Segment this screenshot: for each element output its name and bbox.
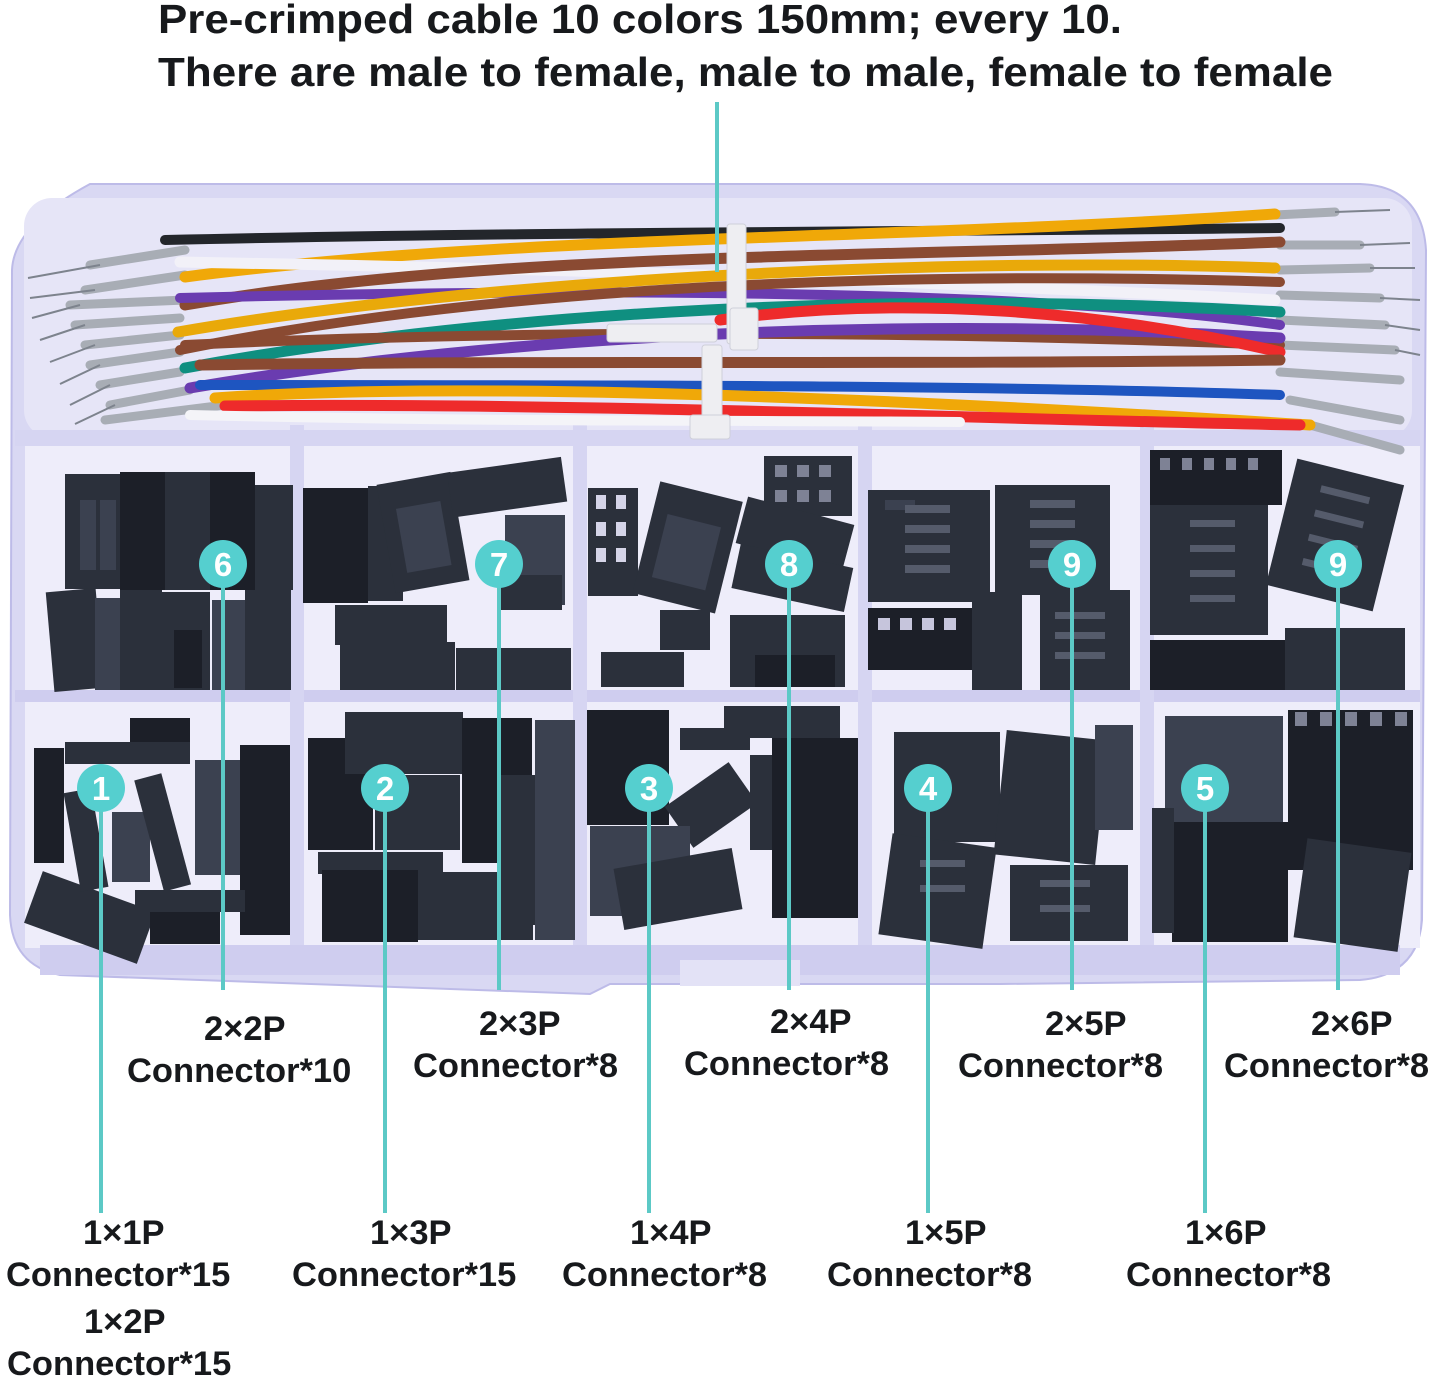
marker 1: 1 (92, 770, 110, 807)
label 1x1P and 1x2P: Connector*15 (6, 1256, 230, 1294)
cable terminals left (70, 250, 225, 420)
compartment: 1x4P connectors (587, 706, 858, 930)
label 2x6P: Connector*8 (1224, 1047, 1429, 1085)
label 1x4P: 1×4P (630, 1214, 712, 1252)
title: There are male to female, male to male, female to female (158, 49, 1333, 95)
wire bundle (28, 210, 1420, 450)
marker 2: 2 (376, 770, 394, 807)
label 1x1P and 1x2P: 1×1P (83, 1214, 165, 1252)
organizer box (10, 184, 1426, 994)
cable callout line (715, 102, 719, 272)
cable ties (607, 224, 758, 439)
label 1x5P: Connector*8 (827, 1256, 1032, 1294)
label 1x6P: 1×6P (1185, 1214, 1267, 1252)
marker 9 right: 9 (1329, 546, 1347, 583)
marker 4 (904, 764, 952, 1213)
marker 8: 8 (780, 546, 798, 583)
compartment: 1x6P connectors (1152, 710, 1413, 952)
label 2x2P: Connector*10 (127, 1052, 351, 1090)
label 1x6P: Connector*8 (1126, 1256, 1331, 1294)
compartment: 1x3P connectors (308, 712, 575, 942)
colored wires (165, 228, 1280, 240)
marker 9 left: 9 (1063, 546, 1081, 583)
label 2x4P: Connector*8 (684, 1045, 889, 1083)
label 2x4P: 2×4P (770, 1003, 852, 1041)
marker 6 (199, 540, 247, 990)
compartment: 2x5P connectors (868, 485, 1130, 690)
cable terminals right (1275, 212, 1400, 450)
marker 3: 3 (640, 770, 658, 807)
marker 4: 4 (919, 770, 938, 807)
label 1x3P: Connector*15 (292, 1256, 516, 1294)
label 2x6P: 2×6P (1311, 1005, 1393, 1043)
marker 5 (1181, 764, 1229, 1213)
compartment: 1x1P and 1x2P connectors (24, 718, 290, 964)
marker 9 right (1314, 540, 1362, 990)
marker 5: 5 (1196, 770, 1214, 807)
marker 2 (361, 764, 409, 1213)
label 2x2P: 2×2P (204, 1010, 286, 1048)
label 2x5P: Connector*8 (958, 1047, 1163, 1085)
label 2x3P: 2×3P (479, 1005, 561, 1043)
marker 7: 7 (490, 546, 508, 583)
label 2x5P: 2×5P (1045, 1005, 1127, 1043)
label 1x5P: 1×5P (905, 1214, 987, 1252)
title (158, 0, 1333, 95)
compartment: 2x2P connectors (46, 472, 293, 692)
marker 7 (475, 540, 523, 990)
marker 3 (625, 764, 673, 1213)
label 1x1P and 1x2P: 1×2P (84, 1303, 166, 1341)
marker 6: 6 (214, 546, 232, 583)
compartment: 2x4P connectors (588, 456, 854, 687)
marker 8 (765, 540, 813, 990)
compartment: 2x6P connectors (1150, 450, 1405, 690)
marker 9 left (1048, 540, 1096, 990)
compartment: 1x5P connectors (878, 725, 1133, 949)
label 1x4P: Connector*8 (562, 1256, 767, 1294)
compartment: 2x3P connectors (303, 457, 571, 690)
marker 1 (77, 764, 125, 1213)
label 1x3P: 1×3P (370, 1214, 452, 1252)
label 2x3P: Connector*8 (413, 1047, 618, 1085)
